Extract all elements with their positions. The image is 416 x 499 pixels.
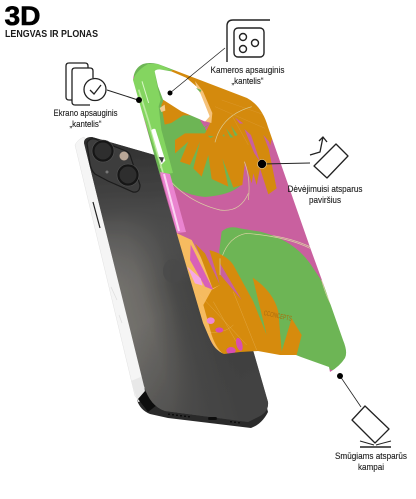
side hole — [151, 129, 165, 165]
callout: camera protection: „kantelis“ — [232, 76, 264, 87]
upper leaf — [170, 70, 277, 200]
icon: screen — [66, 63, 106, 105]
lower pattern — [219, 227, 353, 373]
green strips — [204, 124, 238, 138]
lower side rim — [160, 172, 186, 233]
phone case — [133, 63, 346, 372]
title — [4, 1, 98, 40]
icon: camera — [227, 20, 270, 62]
callout: screen protection — [54, 63, 142, 130]
camera window — [155, 69, 210, 121]
apple logo — [163, 259, 183, 283]
pink specks — [207, 317, 244, 354]
callout: screen protection: „kantelis“ — [70, 119, 102, 130]
phone white side frame — [75, 137, 146, 402]
callout: wear resistant surface: paviršius — [309, 195, 341, 206]
case side rim — [132, 64, 212, 175]
callout: wear resistant surface — [258, 137, 363, 206]
phone back — [75, 137, 268, 428]
light orange rim — [176, 233, 224, 354]
cream lines — [215, 107, 252, 200]
icon: falling phone — [352, 406, 391, 447]
side buttons — [93, 202, 100, 228]
window inner rim — [195, 81, 212, 123]
callout: camera protection: Kameros apsauginis — [210, 65, 285, 76]
callout: impact resistant corners — [335, 373, 407, 473]
phone bottom edge — [137, 380, 268, 428]
speaker and port — [168, 414, 240, 424]
callout: wear resistant surface: Dėvėjimuisi atsparus — [288, 184, 363, 195]
title: 3D — [4, 1, 41, 31]
callout: camera protection — [168, 20, 285, 96]
title: LENGVAS IR PLONAS — [5, 29, 98, 40]
phone rear body — [84, 137, 268, 422]
case logo text: CCONCEPTS — [263, 310, 293, 323]
orange under window — [161, 99, 193, 125]
callout: impact resistant corners: kampai — [358, 462, 384, 473]
camera bump — [87, 139, 140, 192]
lower leaf — [203, 250, 302, 355]
long cream curves — [160, 166, 310, 248]
icon: worn rectangle — [310, 137, 348, 178]
callout: screen protection: Ekrano apsauginis — [54, 108, 118, 119]
pink strips — [235, 118, 277, 188]
upper green field — [130, 60, 240, 197]
